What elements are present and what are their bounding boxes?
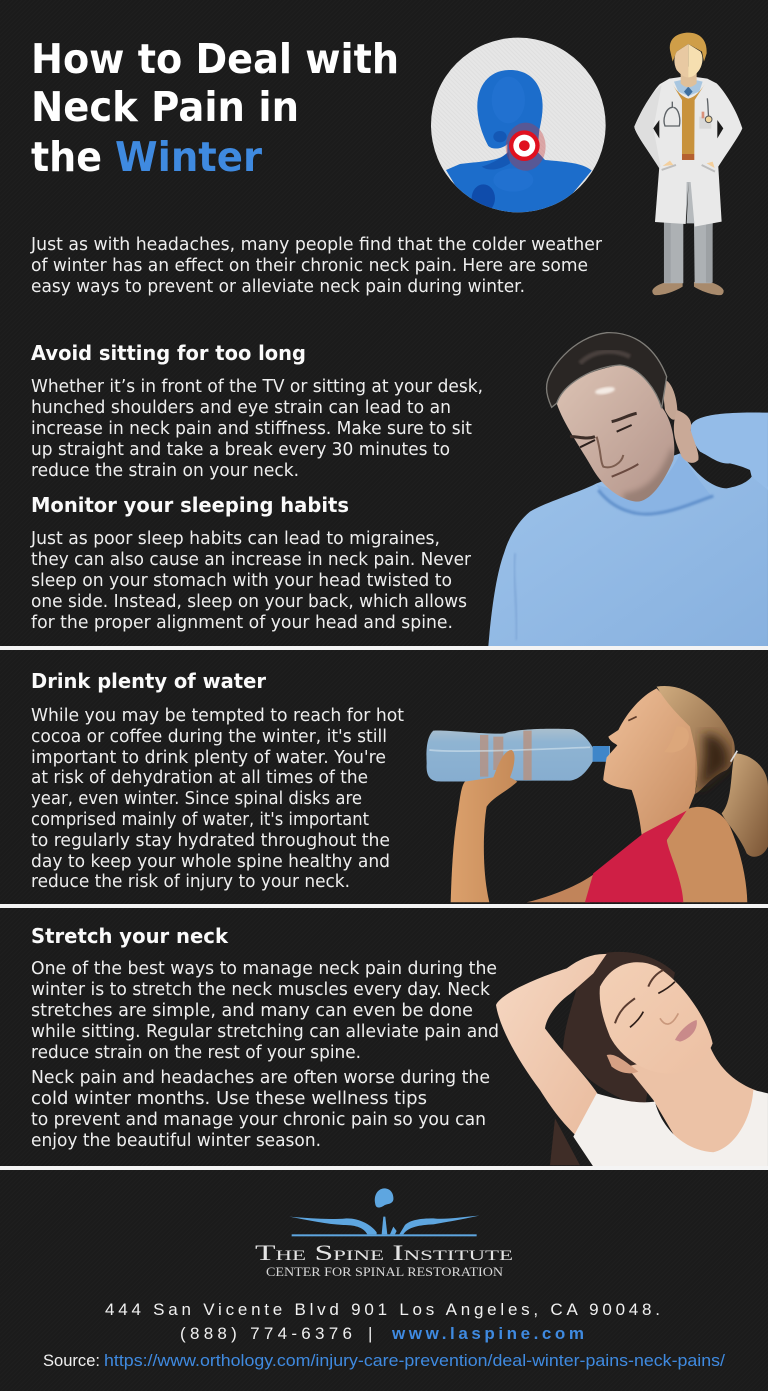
logo: The Spine Institute (255, 1188, 513, 1279)
text: stretch neck (31, 959, 499, 1063)
heading: stretch neck: Stretch your neck (31, 924, 229, 948)
text: avoid sitting: reduce the strain on your neck. (31, 461, 299, 481)
intro text: easy ways to prevent or alleviate neck pain during winter. (31, 277, 525, 297)
text: phone and website: | (368, 1324, 372, 1343)
text: phone and website: (888) 774-6376 (180, 1324, 352, 1343)
text: avoid sitting: up straight and take a break every 30 minutes to (31, 440, 450, 460)
text: drink water: reduce the risk of injury to your neck. (31, 872, 350, 892)
title (31, 35, 399, 181)
intro text: Just as with headaches, many people find that the colder weather (30, 235, 603, 255)
text: drink water: comprised mainly of water, it's important (31, 810, 369, 830)
panel: header (30, 33, 742, 297)
text: avoid sitting: Whether it’s in front of the TV or sitting at your desk, (31, 377, 483, 397)
icon: doctor (634, 33, 742, 295)
photo: woman stretching neck (496, 952, 768, 1167)
title: How to Deal with (31, 35, 399, 83)
text: address: 444 San Vicente Blvd 901 Los Angeles, CA 90048. (105, 1300, 660, 1319)
panel: sitting and sleeping (30, 333, 768, 646)
text: drink water: year, even winter. Since spinal disks are (31, 789, 362, 809)
text: closing (31, 1068, 490, 1151)
text: sleeping habits: for the proper alignment of your head and spine. (31, 613, 453, 633)
panel: footer (43, 1188, 725, 1370)
text: avoid sitting: hunched shoulders and eye strain can lead to an (31, 398, 451, 418)
heading: avoid sitting: Avoid sitting for too long (31, 341, 306, 365)
text: sleeping habits: one side. Instead, sleep on your back, which allows (31, 592, 467, 612)
text: closing: enjoy the beautiful winter season. (31, 1131, 321, 1151)
photo: man holding neck (488, 333, 768, 646)
text: closing: Neck pain and headaches are often worse during the (31, 1068, 490, 1088)
text: phone and website (180, 1324, 584, 1343)
title: Neck Pain in (31, 83, 299, 131)
text: stretch neck: One of the best ways to manage neck pain during the (31, 959, 497, 979)
text: sleeping habits: Just as poor sleep habits can lead to migraines, (30, 529, 440, 549)
text: sleeping habits: sleep on your stomach with your head twisted to (31, 571, 452, 591)
title: Winter (115, 133, 263, 181)
intro text (30, 235, 603, 297)
text: phone and website: www.laspine.com (391, 1324, 584, 1343)
photo: woman drinking from bottle (426, 686, 768, 902)
panel: drink water (31, 669, 768, 902)
heading: drink water: Drink plenty of water (31, 669, 267, 693)
panel: stretch neck (31, 924, 768, 1167)
text: closing: cold winter months. Use these wellness tips (31, 1089, 427, 1109)
logo: The Spine Institute: The Spine Institute (255, 1240, 513, 1265)
text: avoid sitting (31, 377, 483, 481)
text: drink water (31, 706, 404, 892)
text: source: https://www.orthology.com/injury-care-prevention/deal-winter-pains-neck-pains/ (104, 1352, 725, 1370)
text: stretch neck: winter is to stretch the neck muscles every day. Neck (31, 980, 491, 1000)
text: source: Source: (43, 1352, 100, 1370)
text: stretch neck: reduce strain on the rest of your spine. (31, 1043, 361, 1063)
text: stretch neck: stretches are simple, and many can even be done (31, 1001, 473, 1021)
text: drink water: to regularly stay hydrated throughout the (31, 831, 390, 851)
logo: The Spine Institute: CENTER FOR SPINAL RESTORATION (266, 1265, 503, 1279)
heading: sleeping habits: Monitor your sleeping habits (31, 493, 349, 517)
text: sleeping habits (30, 529, 472, 633)
text: drink water: at risk of dehydration at all times of the (31, 768, 368, 788)
icon: neck pain circle (431, 38, 606, 217)
text: drink water: While you may be tempted to reach for hot (31, 706, 404, 726)
intro text: of winter has an effect on their chronic neck pain. Here are some (31, 256, 588, 276)
text: drink water: day to keep your whole spine healthy and (31, 852, 390, 872)
text: stretch neck: while sitting. Regular stretching can alleviate pain and (31, 1022, 499, 1042)
title: the (31, 133, 102, 181)
text: sleeping habits: they can also cause an increase in neck pain. Never (31, 550, 472, 570)
text: closing: to prevent and manage your chronic pain so you can (31, 1110, 486, 1130)
text: drink water: cocoa or coffee during the winter, it's still (31, 727, 387, 747)
text: drink water: important to drink plenty of water. You're (31, 748, 386, 768)
text: avoid sitting: increase in neck pain and stiffness. Make sure to sit (31, 419, 472, 439)
